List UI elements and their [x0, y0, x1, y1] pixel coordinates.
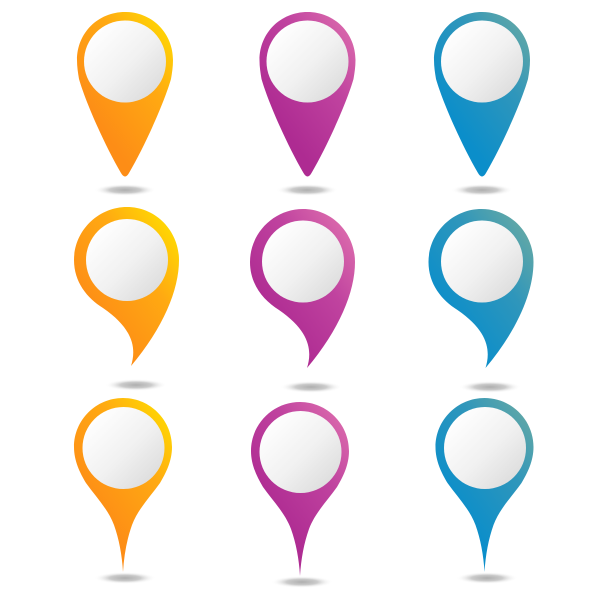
pin: blue teardrop, row 1 [434, 12, 530, 196]
pin: magenta curved, row 2 [250, 209, 355, 393]
pin: blue needle, row 3 [436, 398, 534, 584]
pin: orange teardrop, row 1 [77, 12, 173, 196]
pin: magenta needle, row 3 [251, 402, 349, 588]
pin: orange curved, row 2 [74, 207, 179, 391]
pin: blue curved, row 2 [428, 209, 534, 393]
pin: magenta teardrop, row 1 [260, 12, 356, 196]
pin: orange needle, row 3 [74, 398, 172, 584]
